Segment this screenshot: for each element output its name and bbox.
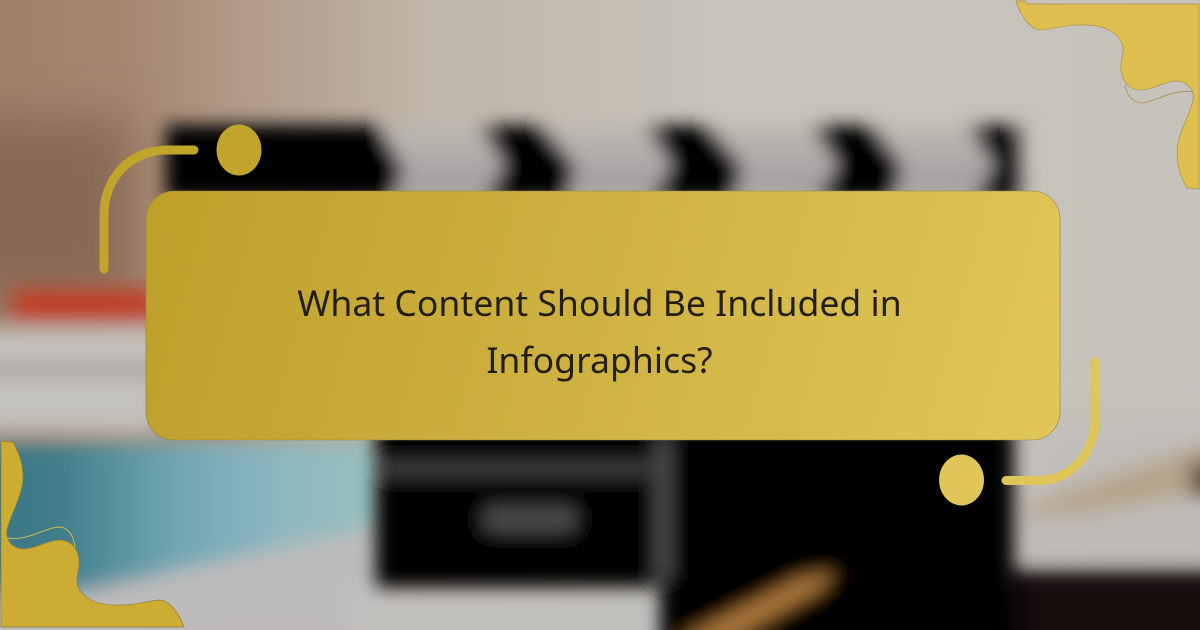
top-right corner ornament xyxy=(1016,1,1199,189)
title text xyxy=(297,279,902,384)
connector: bottom-right arc xyxy=(1006,362,1095,480)
connector: top-left arc xyxy=(104,150,194,269)
icon: top-left dot xyxy=(216,124,262,176)
bottom-left corner ornament xyxy=(1,441,184,627)
title text: What Content Should Be Included in xyxy=(297,279,902,327)
panel: title card xyxy=(146,191,1060,440)
icon: bottom-right dot xyxy=(939,454,984,506)
title text: Infographics? xyxy=(486,336,713,384)
